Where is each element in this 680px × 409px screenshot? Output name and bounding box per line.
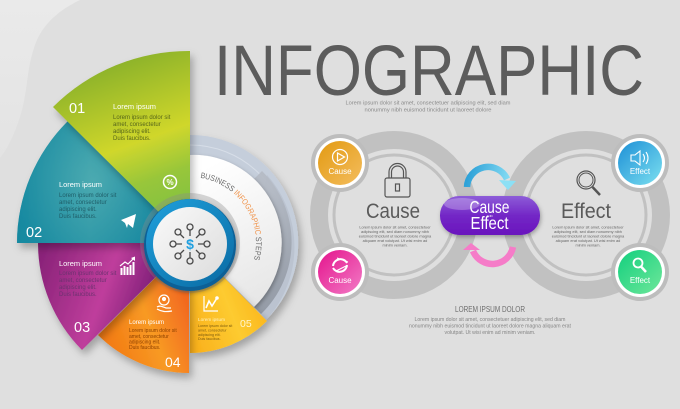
segment 03: 03 <box>74 320 90 336</box>
segment 01: 01 <box>69 101 85 117</box>
icon: magnifier <box>577 171 600 195</box>
bottom text: Lorem ipsum dolor sit amet, consectetuer adipiscing elit, sed diam <box>414 317 566 323</box>
cause text <box>359 224 432 248</box>
effect heading: Effect <box>561 200 611 223</box>
icon: hand holding coin <box>157 295 172 312</box>
segment 01: amet, consectetur <box>113 122 161 128</box>
cause text: adipiscing elit, sed diam nonummy nibh <box>361 229 429 234</box>
segment 01: Lorem ipsum <box>113 104 156 111</box>
segment 03: amet, consectetur <box>59 278 107 284</box>
segment 03: Lorem ipsum <box>59 261 102 268</box>
segment 01: Lorem ipsum dolor sit <box>113 115 171 121</box>
badge: cause top <box>311 134 369 192</box>
segment 04 <box>98 243 190 373</box>
icon: cycle arrows <box>333 258 348 272</box>
effect text: aliquam erat volutpat. Ut wisi enim ad <box>556 238 620 243</box>
cause text: minim veniam. <box>382 242 408 248</box>
cause text: aliquam erat volutpat. Ut wisi enim ad <box>363 238 427 243</box>
segment 02: 02 <box>26 225 42 241</box>
cause heading: Cause <box>366 200 420 223</box>
outer blue-gray disk <box>190 135 298 320</box>
segment 02: adipiscing elit. <box>59 207 97 213</box>
segment 05: 05 <box>240 318 252 330</box>
effect text: minim veniam. <box>575 242 601 248</box>
cause text: euismod tincidunt ut laoreet dolore magna <box>359 234 432 238</box>
segment 03: adipiscing elit. <box>59 285 97 291</box>
segment 04: Lorem ipsum dolor sit <box>129 328 177 334</box>
bottom text: nonummy nibh euismod tincidunt ut laoreet dolore magna aliquam erat <box>409 324 571 330</box>
segment 04: 04 <box>165 354 181 370</box>
effect text: euismod tincidunt ut laoreet dolore magna <box>552 234 625 238</box>
segment 02: Lorem ipsum dolor sit <box>59 193 117 199</box>
segment 05: adipiscing elit. <box>198 333 221 337</box>
effect text: Lorem ipsum dolor sit amet, consectetuer <box>552 224 624 230</box>
segment 04: amet, consectetur <box>129 334 169 340</box>
icon: network with dollar: $ <box>186 236 194 252</box>
center pill <box>440 196 540 235</box>
segment 05: Lorem ipsum <box>198 317 225 323</box>
segment 02: Duis faucibus. <box>59 214 97 220</box>
badge: cause bottom: Cause <box>328 276 352 285</box>
segment 05 <box>190 243 267 353</box>
segment 05: Lorem ipsum dolor sit <box>198 324 232 328</box>
decorative light shape <box>0 0 80 158</box>
white disk with curved heading <box>190 154 285 310</box>
badge: cause bottom <box>311 243 369 301</box>
icon: padlock <box>385 164 410 197</box>
badge: effect bottom: Effect <box>630 276 651 285</box>
title subtext: nonummy nibh euismod tincidunt ut laoreet dolore <box>364 108 492 114</box>
segment 01: Duis faucibus. <box>113 136 151 142</box>
icon: line chart <box>204 296 218 311</box>
segment 04: adipiscing elit. <box>129 340 160 346</box>
center hub <box>140 193 240 293</box>
segment 05: amet, consectetur <box>198 328 227 332</box>
arrow: blue <box>467 167 516 190</box>
icon: bar chart <box>120 256 135 275</box>
icon: speaker <box>631 151 648 165</box>
ring: cause <box>319 140 469 290</box>
white disk with curved heading: BUSINESS INFOGRAPHIC STEPS <box>200 172 262 260</box>
segment 03: Lorem ipsum dolor sit <box>59 271 117 277</box>
effect text: adipiscing elit, sed diam nonummy nibh <box>554 229 622 234</box>
effect text <box>552 224 625 248</box>
segment 04: Lorem ipsum <box>129 319 164 326</box>
icon: small magnifier <box>634 258 646 272</box>
center pill: AND <box>486 214 493 218</box>
icon: percent badge <box>164 176 176 188</box>
segment 02 <box>17 121 190 243</box>
segment 02: amet, consectetur <box>59 200 107 206</box>
segment 03 <box>38 243 190 350</box>
center pill: Effect <box>470 213 509 233</box>
cause effect diagram <box>311 134 669 301</box>
badge: effect top: Effect <box>630 167 651 176</box>
segment 05: Duis faucibus. <box>198 337 221 341</box>
arrow: pink <box>463 243 513 264</box>
bottom text <box>409 317 571 336</box>
title subtext: Lorem ipsum dolor sit amet, consectetuer adipiscing elit, sed diam <box>346 100 511 106</box>
cause text: Lorem ipsum dolor sit amet, consectetuer <box>359 224 431 230</box>
bottom heading: LOREM IPSUM DOLOR <box>455 305 525 314</box>
ring: effect <box>511 140 661 290</box>
icon: play <box>332 150 348 164</box>
badge: effect top <box>611 134 669 192</box>
segment 01 <box>53 51 190 243</box>
segment 04: Duis faucibus. <box>129 345 160 351</box>
segment 03: Duis faucibus. <box>59 292 97 298</box>
icon: percent badge: % <box>166 178 174 187</box>
bottom text: volutpat. Ut wisi enim ad minim veniam. <box>444 330 536 336</box>
wheel infographic <box>16 51 306 382</box>
badge: cause top: Cause <box>328 167 352 176</box>
icon: paper plane <box>121 214 136 228</box>
segment 01: adipiscing elit. <box>113 129 151 135</box>
center pill: Cause <box>470 197 510 217</box>
badge: effect bottom <box>611 243 669 301</box>
title subtext <box>346 100 511 114</box>
segment 02: Lorem ipsum <box>59 182 102 189</box>
